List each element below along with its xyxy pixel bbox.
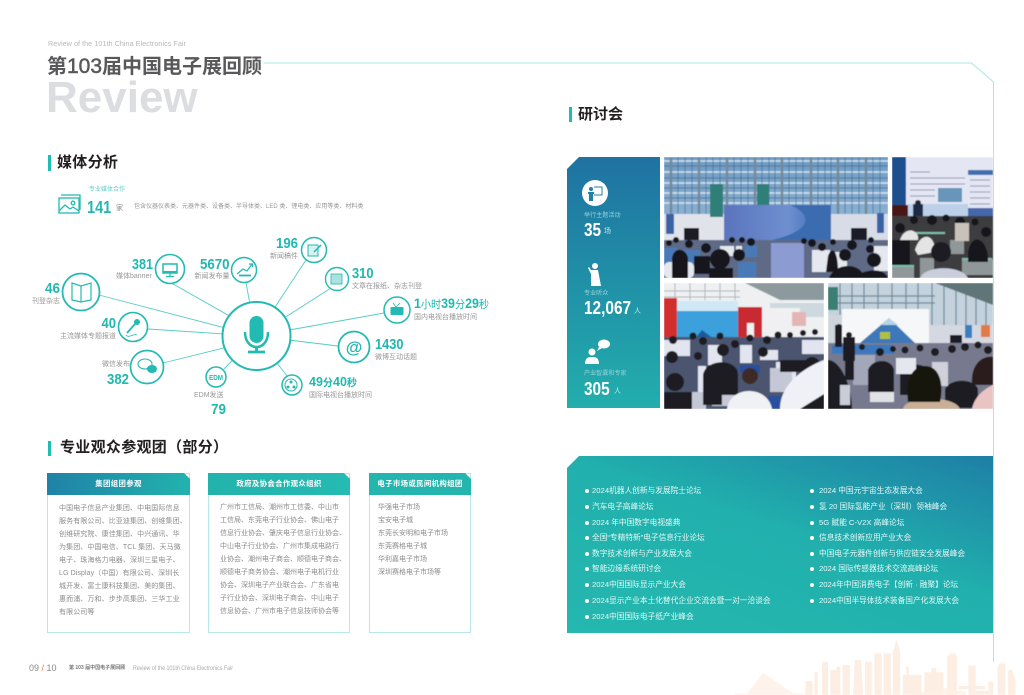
top small title: Review of the 101th China Electronics Fair <box>48 39 186 48</box>
photo: keynote stage with blue banner <box>664 157 888 278</box>
node: domestic tv: 1小时39分29秒 <box>414 296 489 311</box>
card text: 顺德电子商务协会、潮州电子电机行业 <box>220 569 339 576</box>
forum item: 2024中国半导体技术装备国产化发展大会 <box>819 596 959 605</box>
ghost word Review: Review <box>46 72 198 122</box>
heading: visitor groups: 专业观众参观团（部分） <box>60 439 228 456</box>
node: weibo: 1430 <box>375 336 404 353</box>
media partner block <box>58 186 364 217</box>
label: events: 举行主题活动 <box>584 212 621 219</box>
forum item: 汽车电子高峰论坛 <box>592 502 654 511</box>
forum item: 5G 赋能 C-V2X 高峰论坛 <box>819 518 904 527</box>
node: weibo: @ <box>346 338 362 357</box>
node: main media: 主流媒体专题报道 <box>60 331 116 340</box>
card text: 电子、珠海格力电器、深圳三星电子、 <box>59 557 180 564</box>
card text: 为集团、中国电信、TCL 集团、天马微 <box>59 544 181 551</box>
card text: 东莞赛格电子城 <box>378 543 427 550</box>
node: press releases: 新闻发布量 <box>194 271 230 280</box>
node: EDM: EDM <box>209 375 223 382</box>
node: main media <box>60 312 148 342</box>
card text: 创维研究院、康佳集团、中兴通讯、华 <box>59 531 180 538</box>
card text <box>59 504 187 616</box>
node: banner <box>116 254 184 284</box>
card text: 有限公司等 <box>59 609 94 616</box>
number 141: 141 <box>87 197 111 217</box>
card header <box>208 473 350 495</box>
card header: 集团组团参观 <box>95 479 142 488</box>
card text: 工信局、东莞电子行业协会、佛山电子 <box>220 517 339 524</box>
node: magazines: 刊登杂志 <box>32 296 60 305</box>
description: 包含仪器仪表类、元器件类、设备类、半导体类、LED 类、锂电类、应用等类、材料类 <box>134 204 363 210</box>
node: press releases <box>194 256 256 282</box>
photo: audience with red and blue stage <box>664 283 824 409</box>
unit: 人 <box>634 308 641 315</box>
node: wechat: 微信发布 <box>102 359 130 368</box>
panel: seminar stats <box>567 157 660 408</box>
node: EDM <box>194 367 226 418</box>
label: experts: 产业智囊和专家 <box>584 370 627 377</box>
node: news drafts: 196 <box>276 235 298 252</box>
node: EDM: EDM发送 <box>194 390 224 399</box>
panel: forum list <box>567 456 993 633</box>
icon: presenter <box>582 180 608 206</box>
node: wechat: 382 <box>107 371 129 388</box>
node: international tv: 国际电视台播放时间 <box>309 390 372 399</box>
node: international tv: 49分40秒 <box>309 374 357 389</box>
forum item: 2024年中国消费电子【创新 · 融聚】论坛 <box>819 580 958 589</box>
card text: 东莞长安明和电子市场 <box>378 530 448 537</box>
heading: media analysis: 媒体分析 <box>57 154 118 171</box>
media hub chart <box>32 235 489 418</box>
unit: 场 <box>604 228 611 235</box>
card text: 服务有限公司、比亚迪集团、创维集团、 <box>59 518 187 525</box>
node: EDM: 79 <box>211 401 226 418</box>
forum item: 2024中国国际显示产业大会 <box>592 580 686 589</box>
icon: picture <box>58 194 81 214</box>
icon: expert <box>585 340 610 364</box>
card text: 惠而浦、万和、步步高集团、三华工业 <box>59 596 180 603</box>
node: weibo: 微博互动话题 <box>375 352 417 361</box>
card text: 城开发、富士康科技集团、美的集团、 <box>59 583 180 590</box>
forum item: 2024机器人创新与发展院士论坛 <box>592 486 701 495</box>
forum item: 智能边缘系统研讨会 <box>592 564 661 573</box>
forum item: 2024显示产业本土化替代企业交流会暨一对一洽谈会 <box>592 596 771 605</box>
card header: 政府及协会合作观众组织 <box>236 479 322 488</box>
node: domestic tv: 国内电视台播放时间 <box>414 312 477 321</box>
card header <box>369 473 471 495</box>
forum item: 2024 年中国数字电视盛典 <box>592 518 680 527</box>
forum item: 信息技术创新应用产业大会 <box>819 533 911 542</box>
card text: 中国电子信息产业集团、中电国际信息 <box>59 505 180 512</box>
main title: 第103届中国电子展回顾 <box>47 54 262 78</box>
card header <box>47 473 190 495</box>
footer title: 第 103 届中国电子展回顾 <box>69 665 125 671</box>
card text: 广州市工信局、潮州市工信委、中山市 <box>220 504 339 511</box>
photo: forum stage with pyramid screen <box>828 283 993 409</box>
node: magazines <box>32 274 100 310</box>
card: government and associations <box>208 473 350 633</box>
label: audience: 专业听众 <box>584 290 608 297</box>
forum item: 数字技术创新与产业发展大会 <box>592 549 692 558</box>
card text <box>378 503 448 576</box>
card text: 华利嘉电子市场 <box>378 556 427 563</box>
label: media partners: 专业媒体合作 <box>89 187 125 193</box>
node: newspaper articles: 310 <box>352 265 374 282</box>
card text: 信息协会、广州市电子信息技师协会等 <box>220 608 339 615</box>
node: news drafts <box>270 235 326 262</box>
heading bar: seminars <box>569 107 572 122</box>
number: 305: 305 <box>584 379 610 399</box>
node: main media: 40 <box>102 315 116 332</box>
card: corporate groups <box>47 473 190 633</box>
unit: 家 <box>116 205 123 212</box>
number: 35: 35 <box>584 220 601 240</box>
card text: 华强电子市场 <box>378 504 420 511</box>
forum item: 氢 20 国际氢能产业（深圳）领袖峰会 <box>819 502 947 511</box>
node: newspaper articles: 文章在报纸、杂志刊登 <box>352 281 422 290</box>
node: banner: 381 <box>132 256 153 273</box>
node: press releases: 5670 <box>200 256 230 273</box>
number: 12,067: 12,067 <box>584 298 631 318</box>
forum item: 2024中国国际电子纸产业峰会 <box>592 612 694 621</box>
photo: speaker in front of projection <box>892 157 993 278</box>
card text: LG Display（中国）有限公司、深圳长 <box>59 570 179 577</box>
node: international tv <box>282 374 372 399</box>
card text <box>220 503 346 615</box>
card text: 业协会、潮州电子商会、顺德电子商会、 <box>220 556 346 563</box>
hub: microphone <box>222 302 290 370</box>
card text: 宝安电子城 <box>378 517 413 524</box>
card text: 协会、深圳电子产业联合会、广东省电 <box>220 582 339 589</box>
forum item: 2024 国际传感器技术交流高峰论坛 <box>819 564 938 573</box>
node: domestic tv <box>384 296 489 323</box>
node: newspaper articles <box>326 265 422 290</box>
card header: 电子市场或民间机构组团 <box>377 479 463 488</box>
node: banner: 媒体banner <box>116 271 152 280</box>
node: news drafts: 新闻稿件 <box>270 251 298 260</box>
heading bar: visitors <box>48 441 51 456</box>
node: weibo <box>338 332 417 362</box>
forum item: 全国“专精特新”电子信息行业论坛 <box>592 533 705 542</box>
node: wechat <box>102 350 164 388</box>
card text: 深圳赛格电子市场等 <box>378 569 441 576</box>
heading: seminars: 研讨会 <box>578 106 623 123</box>
forum item: 2024 中国元宇宙生态发展大会 <box>819 486 923 495</box>
forum item: 中国电子元器件创新与供应链安全发展峰会 <box>819 549 965 558</box>
unit: 人 <box>614 388 621 395</box>
footer page number: 09 / 10 <box>29 663 57 673</box>
skyline decoration <box>735 640 1016 695</box>
node: magazines: 46 <box>45 280 60 297</box>
icon: listener <box>588 263 601 286</box>
card text: 子行业协会、深圳电子商会、中山电子 <box>220 595 339 602</box>
card text: 信息行业协会、肇庆电子信息行业协会、 <box>220 530 346 537</box>
card: markets <box>369 473 471 633</box>
heading bar: media <box>48 155 51 171</box>
card text: 中山电子行业协会、广州市集成电路行 <box>220 543 339 550</box>
